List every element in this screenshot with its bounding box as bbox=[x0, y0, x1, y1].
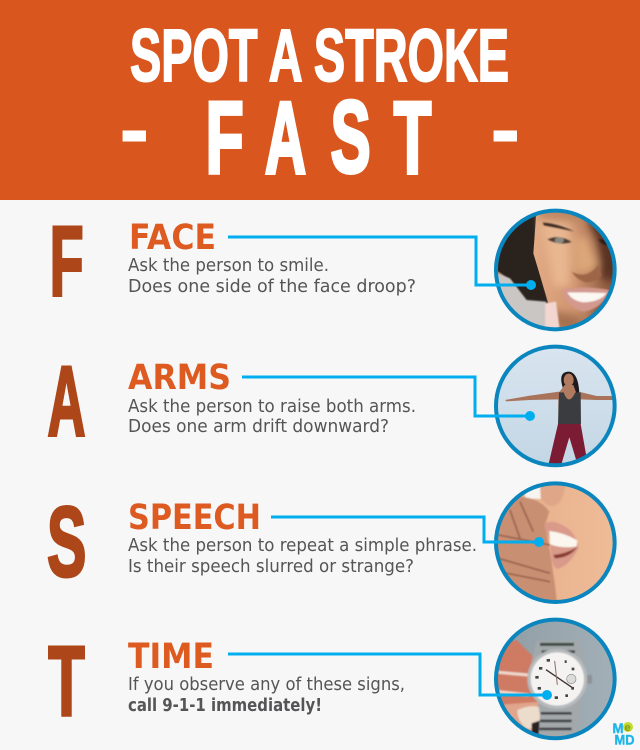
photo: smiling face bbox=[493, 208, 620, 332]
heading: Arms: ARMS bbox=[128, 358, 231, 398]
connector: Arms bbox=[242, 377, 535, 421]
logo: MeMD: M bbox=[612, 720, 624, 736]
connector: Face bbox=[228, 237, 536, 290]
photo: wristwatch in hand bbox=[493, 617, 618, 742]
description: Arms bbox=[128, 396, 416, 437]
connector: Time bbox=[228, 654, 552, 700]
title: FAST with dashes: - bbox=[119, 78, 150, 180]
letter S: S bbox=[47, 486, 86, 597]
description: Speech: Ask the person to repeat a simple phrase. bbox=[128, 535, 477, 556]
title: FAST with dashes: - bbox=[490, 78, 521, 180]
header banner bbox=[0, 0, 640, 200]
description: Time: If you observe any of these signs, bbox=[128, 674, 405, 695]
heading: Speech: SPEECH bbox=[128, 498, 261, 538]
photo: woman raising arms bbox=[493, 343, 618, 468]
letter T: T bbox=[48, 626, 85, 736]
description: Face: Does one side of the face droop? bbox=[128, 276, 416, 297]
title: FAST with dashes: F bbox=[206, 81, 244, 195]
heading: Time: TIME bbox=[128, 637, 214, 677]
logo: MeMD: MD bbox=[614, 732, 634, 748]
description: Arms: Does one arm drift downward? bbox=[128, 416, 389, 437]
logo: MeMD bbox=[612, 720, 634, 748]
photo: whispering mouth and hand bbox=[493, 482, 618, 607]
row: Speech bbox=[47, 482, 618, 607]
row: Time bbox=[48, 617, 618, 742]
description: Speech: Is their speech slurred or strange? bbox=[128, 556, 414, 577]
title: FAST with dashes: A bbox=[265, 81, 306, 195]
description: Arms: Ask the person to raise both arms. bbox=[128, 396, 416, 417]
logo: MeMD: e bbox=[624, 722, 631, 734]
title: FAST with dashes bbox=[119, 78, 521, 195]
letter A: A bbox=[48, 346, 86, 456]
row: Arms bbox=[48, 343, 618, 468]
description: Time: call 9-1-1 immediately! bbox=[128, 695, 322, 716]
description: Time bbox=[128, 674, 405, 716]
title: FAST with dashes: T bbox=[394, 81, 431, 195]
letter F: F bbox=[50, 206, 84, 316]
description: Face bbox=[128, 255, 416, 297]
description: Speech bbox=[128, 535, 477, 577]
heading: Face: FACE bbox=[129, 218, 216, 258]
connector: Speech bbox=[271, 517, 544, 547]
title: FAST with dashes: S bbox=[331, 80, 371, 194]
row: Face bbox=[50, 206, 620, 332]
description: Face: Ask the person to smile. bbox=[128, 255, 329, 276]
